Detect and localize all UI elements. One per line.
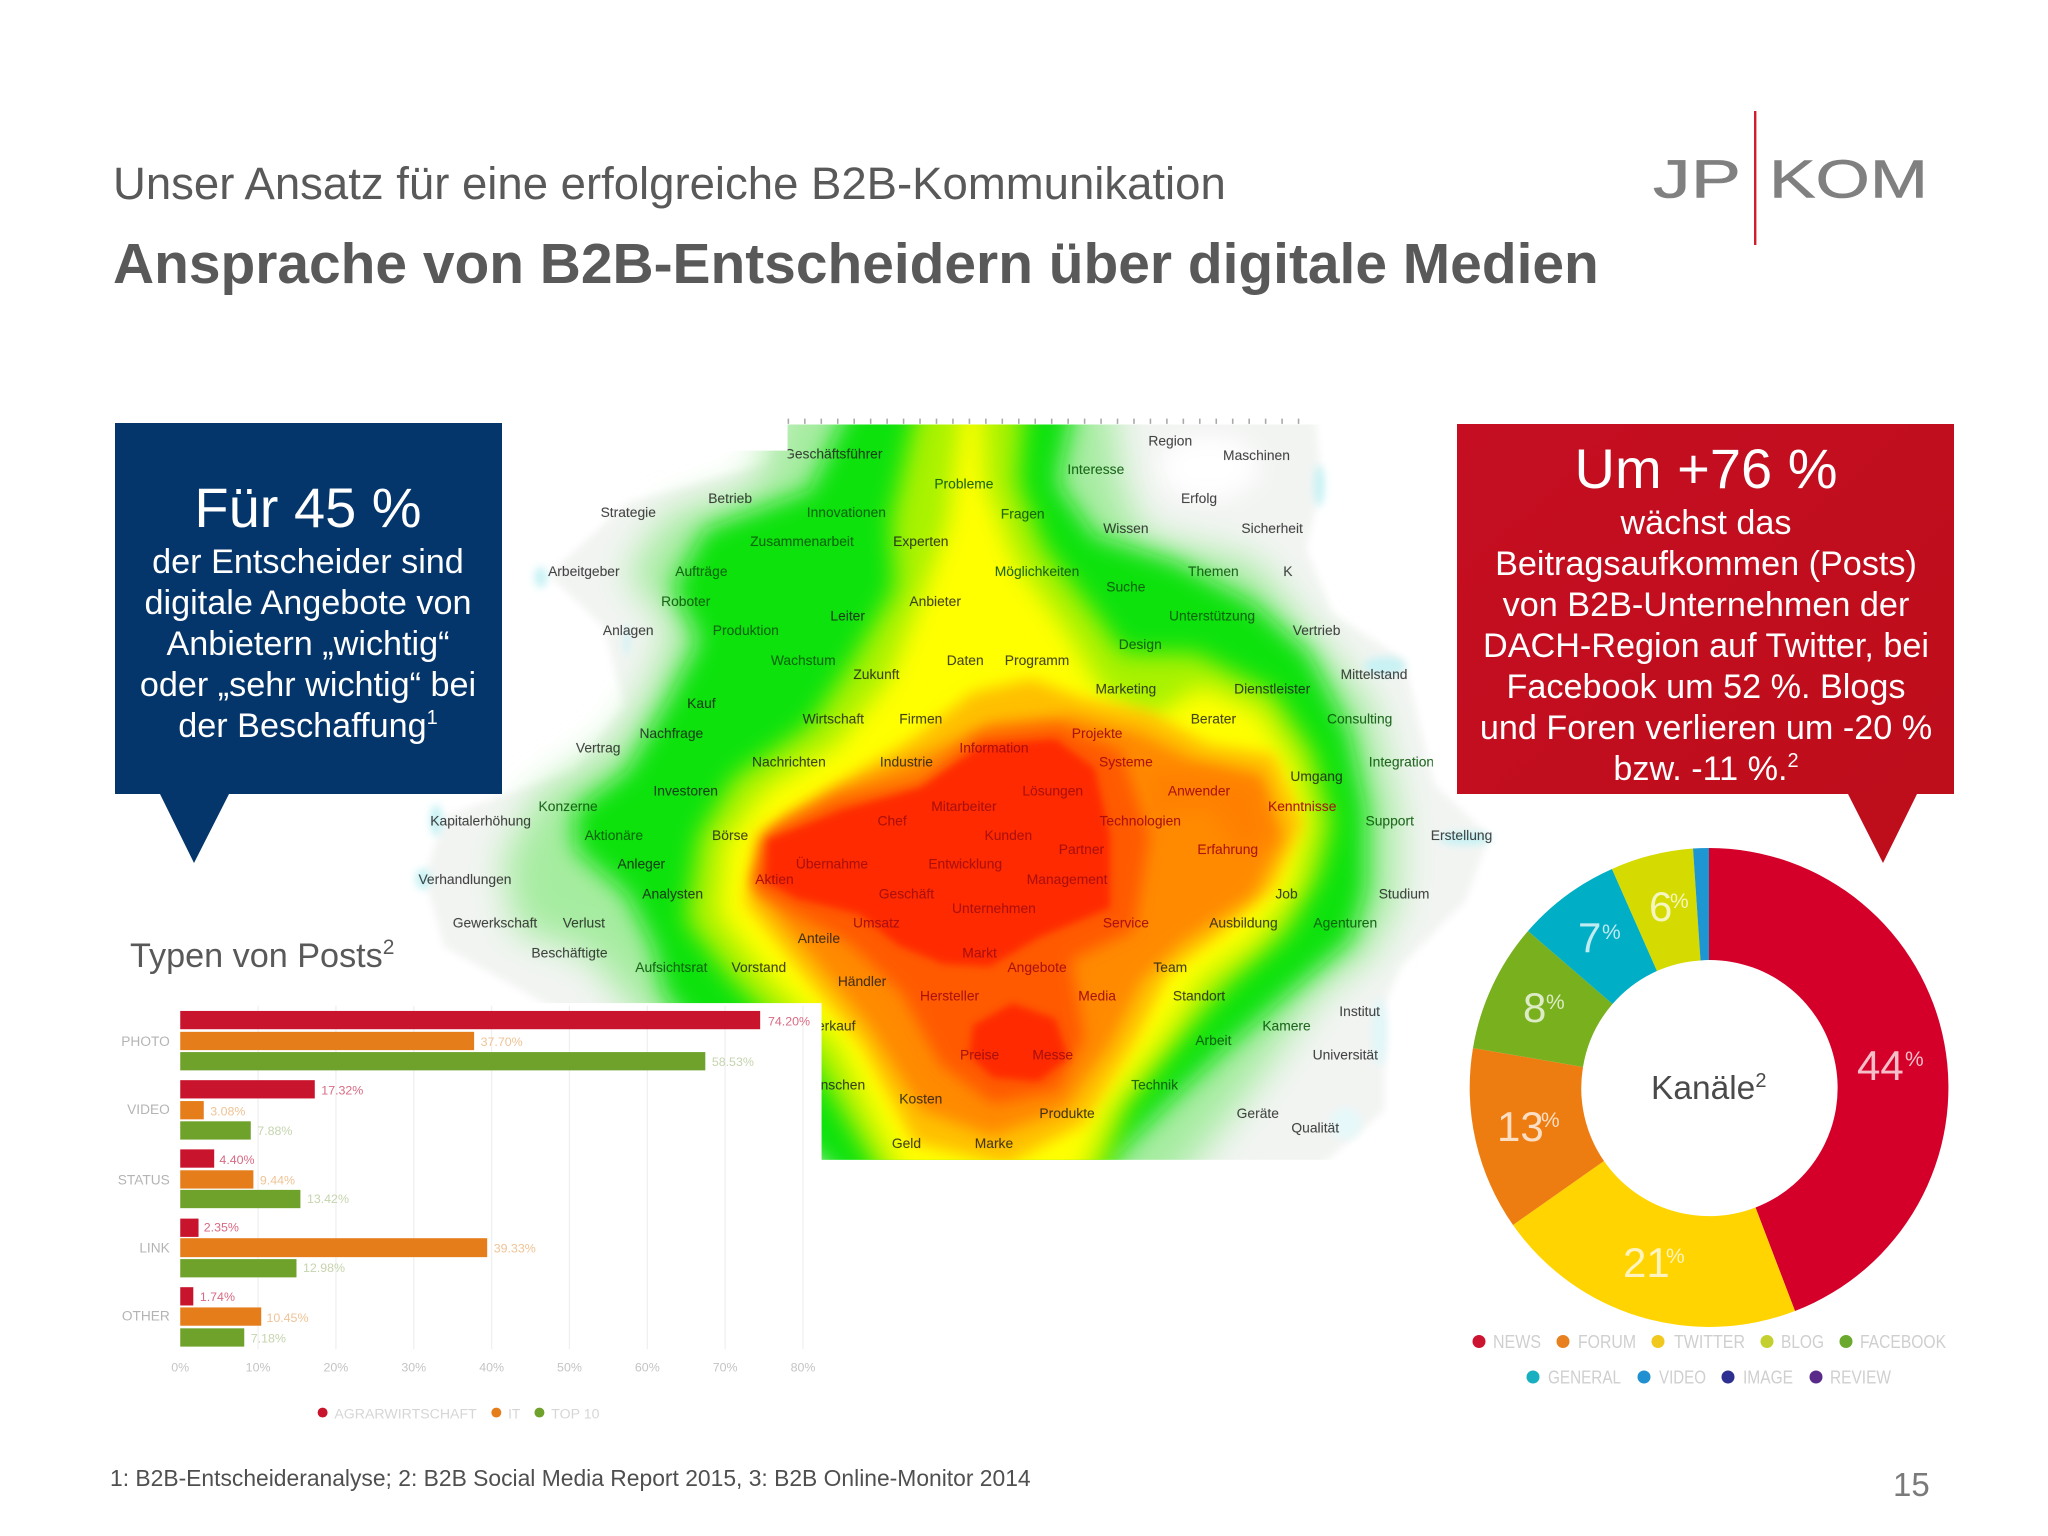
heatmap keywords: Erfahrung (1197, 841, 1258, 857)
heatmap keywords: Geschäftsführer (784, 445, 883, 461)
heatmap keywords: Übernahme (796, 855, 868, 872)
heatmap keywords: Vertrag (576, 739, 620, 755)
heatmap keywords: Interesse (1067, 461, 1125, 477)
heatmap keywords: Systeme (1099, 754, 1153, 770)
heatmap keywords: Mitarbeiter (931, 798, 997, 814)
slice: video (1693, 848, 1709, 960)
callout headline: Für 45 % (194, 476, 422, 539)
value labels (200, 1014, 810, 1346)
logo: JP KOM (1653, 111, 1928, 245)
heatmap keywords: Arbeit (1195, 1032, 1232, 1048)
heatmap keywords: Börse (712, 827, 748, 843)
heatmap keywords: Firmen (899, 711, 942, 727)
callout text: von B2B-Unternehmen der (1503, 586, 1909, 624)
heatmap keywords: Experten (893, 533, 948, 549)
heatmap keywords: Maschinen (1223, 447, 1290, 463)
heatmap keywords: Daten (947, 652, 984, 668)
value labels: 37.70% (481, 1035, 523, 1049)
category labels: PHOTO (121, 1034, 170, 1049)
value labels: 10.45% (266, 1311, 308, 1325)
percent labels: 13 (1497, 1103, 1544, 1150)
heatmap keywords: Unterstützung (1169, 607, 1255, 623)
heatmap keywords: Projekte (1072, 725, 1123, 741)
heatmap keywords: Support (1365, 812, 1414, 828)
heatmap keywords: Aktien (755, 871, 794, 887)
heatmap keywords: Suche (1106, 579, 1146, 595)
bars: IT (180, 1032, 487, 1326)
callout text (1480, 504, 1932, 788)
logo: JP KOM: KOM (1769, 150, 1928, 210)
heatmap keywords (418, 432, 1492, 1151)
heatmap keywords: Menschen (801, 1076, 865, 1092)
percent labels: % (1905, 1048, 1924, 1071)
heatmap keywords: Erstellung (1431, 827, 1492, 843)
heatmap keywords: Möglichkeiten (995, 563, 1079, 579)
heatmap keywords: Agenturen (1313, 914, 1377, 930)
callout text: und Foren verlieren um -20 % (1480, 709, 1932, 747)
heatmap keywords: Universität (1313, 1046, 1378, 1062)
x axis labels (171, 1360, 815, 1374)
heatmap keywords: Angebote (1007, 959, 1067, 975)
heatmap keywords: Markt (962, 944, 997, 960)
heatmap keywords: Themen (1188, 563, 1239, 579)
heatmap keywords: Institut (1339, 1003, 1380, 1019)
heatmap keywords: Betrieb (708, 490, 752, 506)
heatmap keywords: Sicherheit (1241, 520, 1303, 536)
heatmap keywords: Messe (1032, 1046, 1073, 1062)
value labels: 9.44% (260, 1174, 295, 1188)
heatmap keywords: Technik (1131, 1076, 1178, 1092)
red core (765, 739, 1110, 967)
donut legend: TWITTER (1674, 1332, 1745, 1352)
saturated green (575, 392, 1366, 1202)
callout text: digitale Angebote von (145, 584, 471, 622)
callout text: der Entscheider sind (152, 543, 464, 581)
heatmap keywords: Kapitalerhöhung (430, 812, 531, 828)
value labels: 7.18% (251, 1332, 286, 1346)
donut legend: VIDEO (1659, 1368, 1706, 1388)
bar chart heading: 2 (383, 936, 394, 959)
value labels: 39.33% (494, 1242, 536, 1256)
bar chart legend: TOP 10 (551, 1406, 600, 1421)
heatmap keywords: Marke (975, 1135, 1013, 1151)
heatmap keywords: Mittelstand (1341, 666, 1407, 682)
slice: general (1528, 869, 1657, 1004)
heatmap keywords: Umgang (1290, 768, 1343, 784)
heatmap keywords: Umsatz (853, 914, 900, 930)
value labels: 58.53% (712, 1055, 754, 1069)
callout text: DACH-Region auf Twitter, bei (1483, 627, 1929, 665)
heatmap keywords: Anwender (1168, 782, 1231, 798)
donut chart: Kanäle (1470, 848, 1948, 1327)
heatmap keywords: Dienstleister (1234, 681, 1311, 697)
donut legend (1472, 1332, 1946, 1388)
heatmap keywords: Anteile (798, 930, 840, 946)
bar chart legend: AGRARWIRTSCHAFT (334, 1406, 477, 1421)
orange (755, 716, 1284, 1136)
heatmap keywords: Arbeitgeber (548, 563, 620, 579)
x axis labels: 30% (401, 1360, 426, 1374)
heatmap keywords: Produktion (713, 622, 779, 638)
heatmap keywords: Information (959, 739, 1029, 755)
heatmap keywords: Anlagen (603, 622, 654, 638)
bar chart legend (318, 1406, 600, 1421)
heatmap keywords: Wirtschaft (803, 711, 864, 727)
callout text: 2 (1788, 750, 1799, 772)
heatmap keywords: Media (1078, 987, 1116, 1003)
bars: Agrarwirtschaft (180, 1011, 760, 1305)
percent labels: % (1670, 890, 1689, 913)
value labels: 3.08% (210, 1104, 245, 1118)
heatmap keywords: Produkte (1039, 1105, 1095, 1121)
value labels: 7.88% (257, 1124, 292, 1138)
percent labels: 6 (1649, 883, 1672, 930)
heatmap keywords: Zukunft (853, 666, 900, 682)
heatmap keywords: Investoren (653, 782, 718, 798)
heatmap keywords: Partner (1059, 841, 1105, 857)
heatmap keywords: Kauf (687, 695, 716, 711)
heatmap keywords: Entwicklung (928, 856, 1002, 872)
slice: facebook (1473, 931, 1612, 1067)
donut legend: FACEBOOK (1860, 1332, 1946, 1352)
heatmap keywords: Kunden (984, 827, 1032, 843)
callout text: Anbietern „wichtig“ (166, 625, 450, 663)
heatmap keywords: Consulting (1327, 711, 1392, 727)
donut legend: IMAGE (1743, 1368, 1793, 1388)
value labels: 1.74% (200, 1290, 235, 1304)
heatmap keywords: Standort (1173, 987, 1225, 1003)
callout text: der Beschaffung (178, 707, 427, 745)
page number: 15 (1893, 1466, 1930, 1503)
heatmap keywords: Job (1275, 886, 1298, 902)
heatmap keywords: Aufsichtsrat (635, 959, 708, 975)
heatmap keywords: Roboter (661, 593, 711, 609)
callout headline: Um +76 % (1574, 437, 1838, 500)
lime (686, 392, 1332, 1202)
x axis labels: 60% (635, 1360, 660, 1374)
heatmap keywords: Anbieter (909, 593, 961, 609)
heatmap keywords: Konzerne (539, 798, 598, 814)
x axis labels: 50% (557, 1360, 582, 1374)
heatmap keywords: K (1283, 563, 1293, 579)
callout text: bzw. -11 %. (1613, 750, 1788, 788)
callout text: Beitragsaufkommen (Posts) (1495, 545, 1917, 583)
gold (744, 679, 1302, 1165)
donut legend: GENERAL (1548, 1368, 1621, 1388)
white hole top right (1166, 442, 1250, 494)
value labels: 4.40% (219, 1153, 255, 1167)
heatmap keywords: Probleme (934, 475, 994, 491)
category labels: STATUS (118, 1173, 170, 1188)
heatmap keywords: Unternehmen (952, 900, 1036, 916)
subtitle: Unser Ansatz für eine erfolgreiche B2B-Kommunikation (113, 158, 1226, 209)
x axis labels: 80% (791, 1360, 815, 1374)
percent labels: 21 (1623, 1239, 1670, 1286)
donut legend: BLOG (1781, 1332, 1824, 1352)
heatmap keywords: Vertrieb (1293, 622, 1341, 638)
slice: news (1709, 848, 1948, 1311)
heatmap keywords: Nachfrage (639, 725, 704, 741)
heatmap keywords: Kamere (1262, 1018, 1311, 1034)
heatmap keywords: Qualität (1291, 1119, 1339, 1135)
slice: forum (1470, 1048, 1604, 1225)
heatmap keywords: Nachrichten (752, 754, 826, 770)
heatmap keywords: Design (1119, 636, 1162, 652)
category labels: OTHER (122, 1308, 170, 1323)
percent labels: % (1546, 991, 1565, 1014)
value labels: 17.32% (321, 1084, 363, 1098)
heatmap keywords: Analysten (642, 886, 703, 902)
percent labels: 8 (1523, 984, 1546, 1031)
heatmap keywords: Studium (1379, 886, 1429, 902)
heatmap keywords: Fragen (1001, 506, 1045, 522)
donut legend: FORUM (1578, 1332, 1636, 1352)
bar chart panel: Typen von Posts (114, 1003, 822, 1441)
heatmap keywords: Beschäftigte (531, 944, 608, 960)
heatmap keywords: Kosten (899, 1091, 942, 1107)
category labels: VIDEO (127, 1102, 170, 1117)
bars: Top 10 (180, 1052, 705, 1347)
heatmap keywords: Berater (1191, 711, 1236, 727)
x axis labels: 40% (479, 1360, 504, 1374)
grid lines (258, 1006, 803, 1349)
callout text: oder „sehr wichtig“ bei (140, 666, 476, 704)
heatmap keywords: Preise (960, 1046, 999, 1062)
heatmap keywords: Erfolg (1181, 490, 1217, 506)
yellow (718, 392, 1309, 1202)
percent labels (1497, 883, 1924, 1286)
title: Ansprache von B2B-Entscheidern über digitale Medien (113, 232, 1599, 296)
orange red (751, 725, 1149, 1104)
heatmap keywords: Verkauf (809, 1018, 856, 1034)
percent labels: % (1541, 1109, 1560, 1132)
heatmap keywords: Gewerkschaft (453, 914, 537, 930)
x axis labels: 20% (324, 1360, 348, 1374)
heatmap keywords: Leiter (830, 607, 865, 623)
category labels: LINK (139, 1241, 170, 1256)
heatmap keywords: Geschäft (879, 886, 934, 902)
callout text: Facebook um 52 %. Blogs (1506, 668, 1906, 706)
heatmap keywords: Anleger (617, 856, 666, 872)
heatmap keywords: Chef (877, 812, 907, 828)
heatmap keywords: Integration (1369, 754, 1434, 770)
bar chart heading: Typen von Posts (130, 937, 383, 975)
x axis labels: 70% (713, 1360, 738, 1374)
donut center label: Kanäle (1651, 1070, 1755, 1107)
percent labels: % (1666, 1245, 1685, 1268)
logo: JP KOM: JP (1653, 150, 1741, 210)
heatmap keywords: Geräte (1237, 1105, 1279, 1121)
donut center label: 2 (1755, 1070, 1766, 1092)
heatmap keywords: Kenntnisse (1268, 798, 1337, 814)
heatmap keywords: Industrie (880, 754, 933, 770)
heatmap keywords: Wissen (1103, 520, 1149, 536)
percent labels: 44 (1857, 1042, 1904, 1089)
x axis labels: 10% (246, 1360, 270, 1374)
heatmap keywords: Technologien (1099, 812, 1181, 828)
heatmap keywords: Aktionäre (585, 827, 643, 843)
heatmap word cloud (415, 392, 1492, 1202)
donut legend: REVIEW (1830, 1368, 1891, 1388)
value labels: 2.35% (204, 1221, 239, 1235)
ruler ticks on top of heatmap (788, 419, 1306, 423)
outer pale contour (430, 424, 1482, 1160)
callout text: 1 (427, 707, 438, 729)
heatmap keywords: Programm (1005, 652, 1069, 668)
red lower core (969, 1003, 1068, 1081)
cyan edge patches (415, 465, 1492, 1139)
heatmap keywords: Wachstum (771, 652, 836, 668)
callout text: wächst das (1619, 504, 1792, 542)
value labels: 13.42% (307, 1192, 349, 1206)
heatmap keywords: Ausbildung (1209, 914, 1278, 930)
value labels: 74.20% (768, 1014, 810, 1028)
pale green (503, 392, 1398, 1202)
heatmap keywords: Service (1103, 914, 1149, 930)
panel: blue callout (115, 423, 502, 863)
heatmap keywords: Geld (892, 1135, 921, 1151)
heatmap keywords: Hersteller (920, 987, 980, 1003)
heatmap keywords: Team (1153, 959, 1187, 975)
x axis labels: 0% (171, 1360, 189, 1374)
value labels: 12.98% (303, 1261, 345, 1275)
heatmap keywords: Verhandlungen (418, 871, 512, 887)
footnote: 1: B2B-Entscheideranalyse; 2: B2B Social Media Report 2015, 3: B2B Online-Monitor 2014 (110, 1465, 1031, 1491)
category labels (118, 1034, 170, 1323)
panel: red callout (1457, 424, 1954, 863)
slice: twitter (1513, 1161, 1795, 1327)
right orange lobe (1156, 769, 1268, 842)
heatmap keywords: Strategie (601, 504, 656, 520)
donut legend: NEWS (1493, 1332, 1541, 1352)
heatmap keywords: Händler (838, 973, 887, 989)
heatmap keywords: Innovationen (807, 504, 886, 520)
percent labels: 7 (1578, 914, 1601, 961)
heatmap keywords: Verlust (563, 914, 605, 930)
heatmap keywords: Lösungen (1022, 782, 1083, 798)
bar chart legend: IT (508, 1406, 521, 1421)
slice: blog (1612, 848, 1700, 971)
heatmap keywords: Vorstand (732, 959, 786, 975)
heatmap keywords: Marketing (1096, 681, 1156, 697)
heatmap keywords: Region (1148, 432, 1192, 448)
heatmap keywords: Aufträge (675, 563, 728, 579)
heatmap keywords: Zusammenarbeit (750, 533, 854, 549)
heatmap keywords: Management (1027, 871, 1108, 887)
callout text (140, 543, 476, 745)
percent labels: % (1602, 921, 1621, 944)
